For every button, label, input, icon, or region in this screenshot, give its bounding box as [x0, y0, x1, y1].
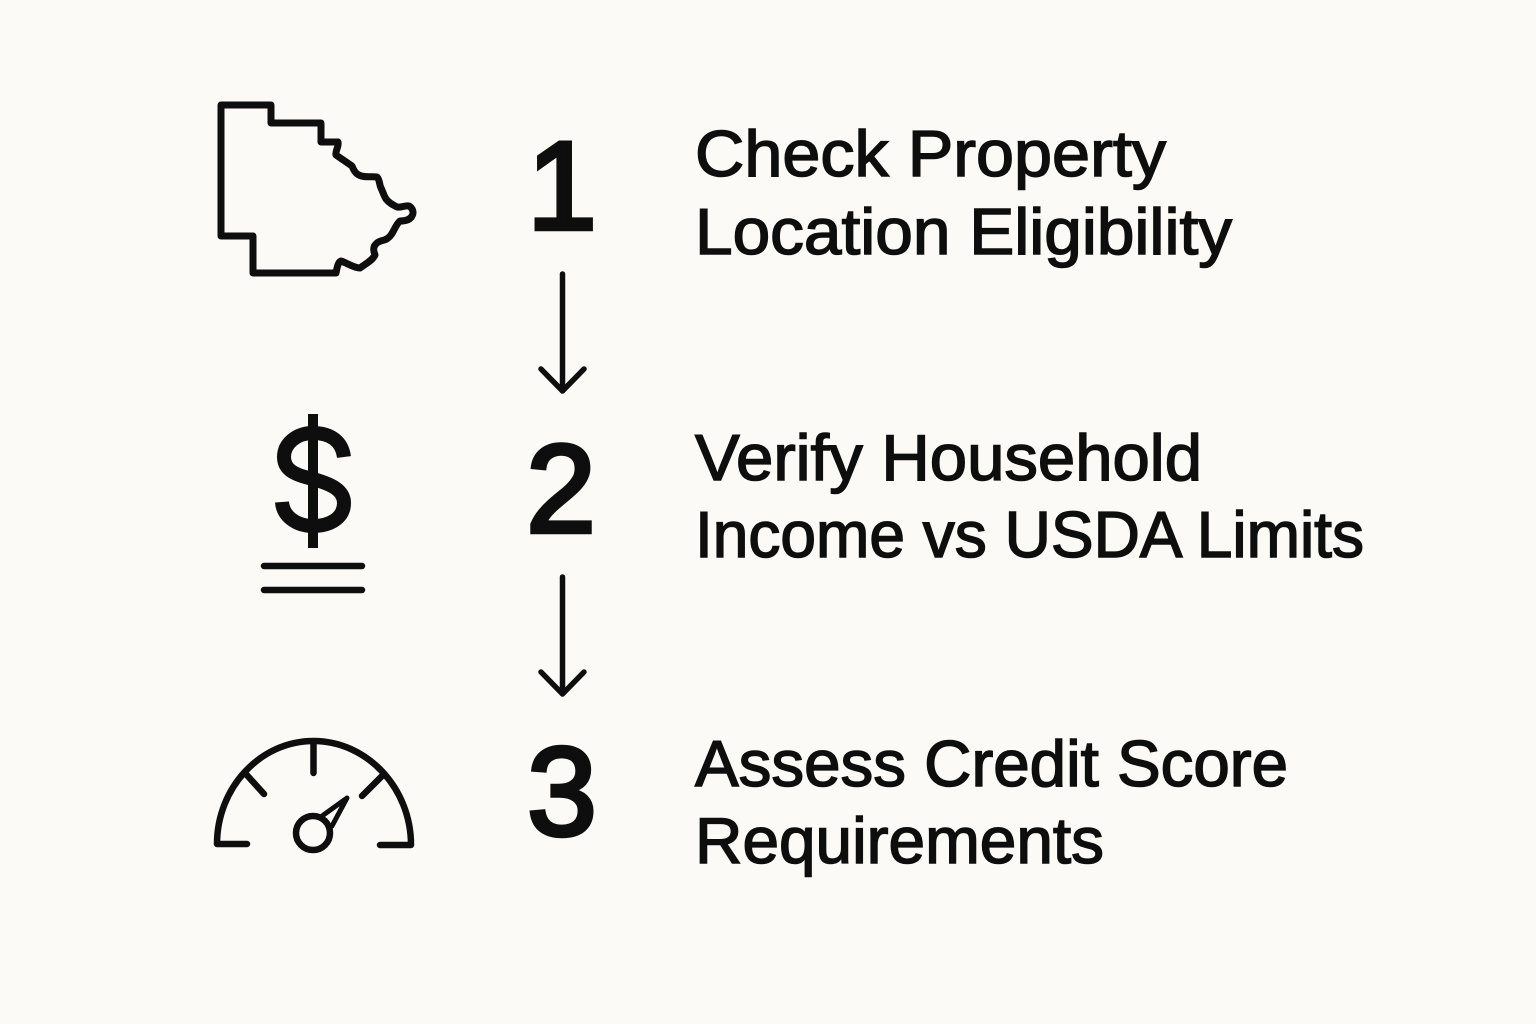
step 3: heading: Requirements: [695, 804, 1104, 877]
arrow: step 2 to step 3: [541, 577, 584, 694]
step 1: heading: Location Eligibility: [695, 195, 1233, 268]
step 1: location map icon: [221, 105, 413, 273]
step 3: heading: Assess Credit Score: [695, 727, 1288, 800]
step 1: number: 1: [527, 117, 597, 256]
step 3: number: 3: [527, 723, 597, 862]
step 2: number: 2: [526, 420, 596, 559]
step 2: income icon: [264, 414, 362, 590]
step 2: heading: Verify Household: [695, 421, 1202, 494]
step 1: heading: Check Property: [695, 117, 1167, 190]
step 1: heading: [695, 117, 1233, 268]
step 2: heading: Income vs USDA Limits: [695, 498, 1364, 571]
step 2: heading: [695, 421, 1364, 571]
step 3: heading: [695, 727, 1288, 877]
arrow: step 1 to step 2: [541, 274, 584, 391]
step 3: credit score gauge icon: [217, 741, 411, 850]
